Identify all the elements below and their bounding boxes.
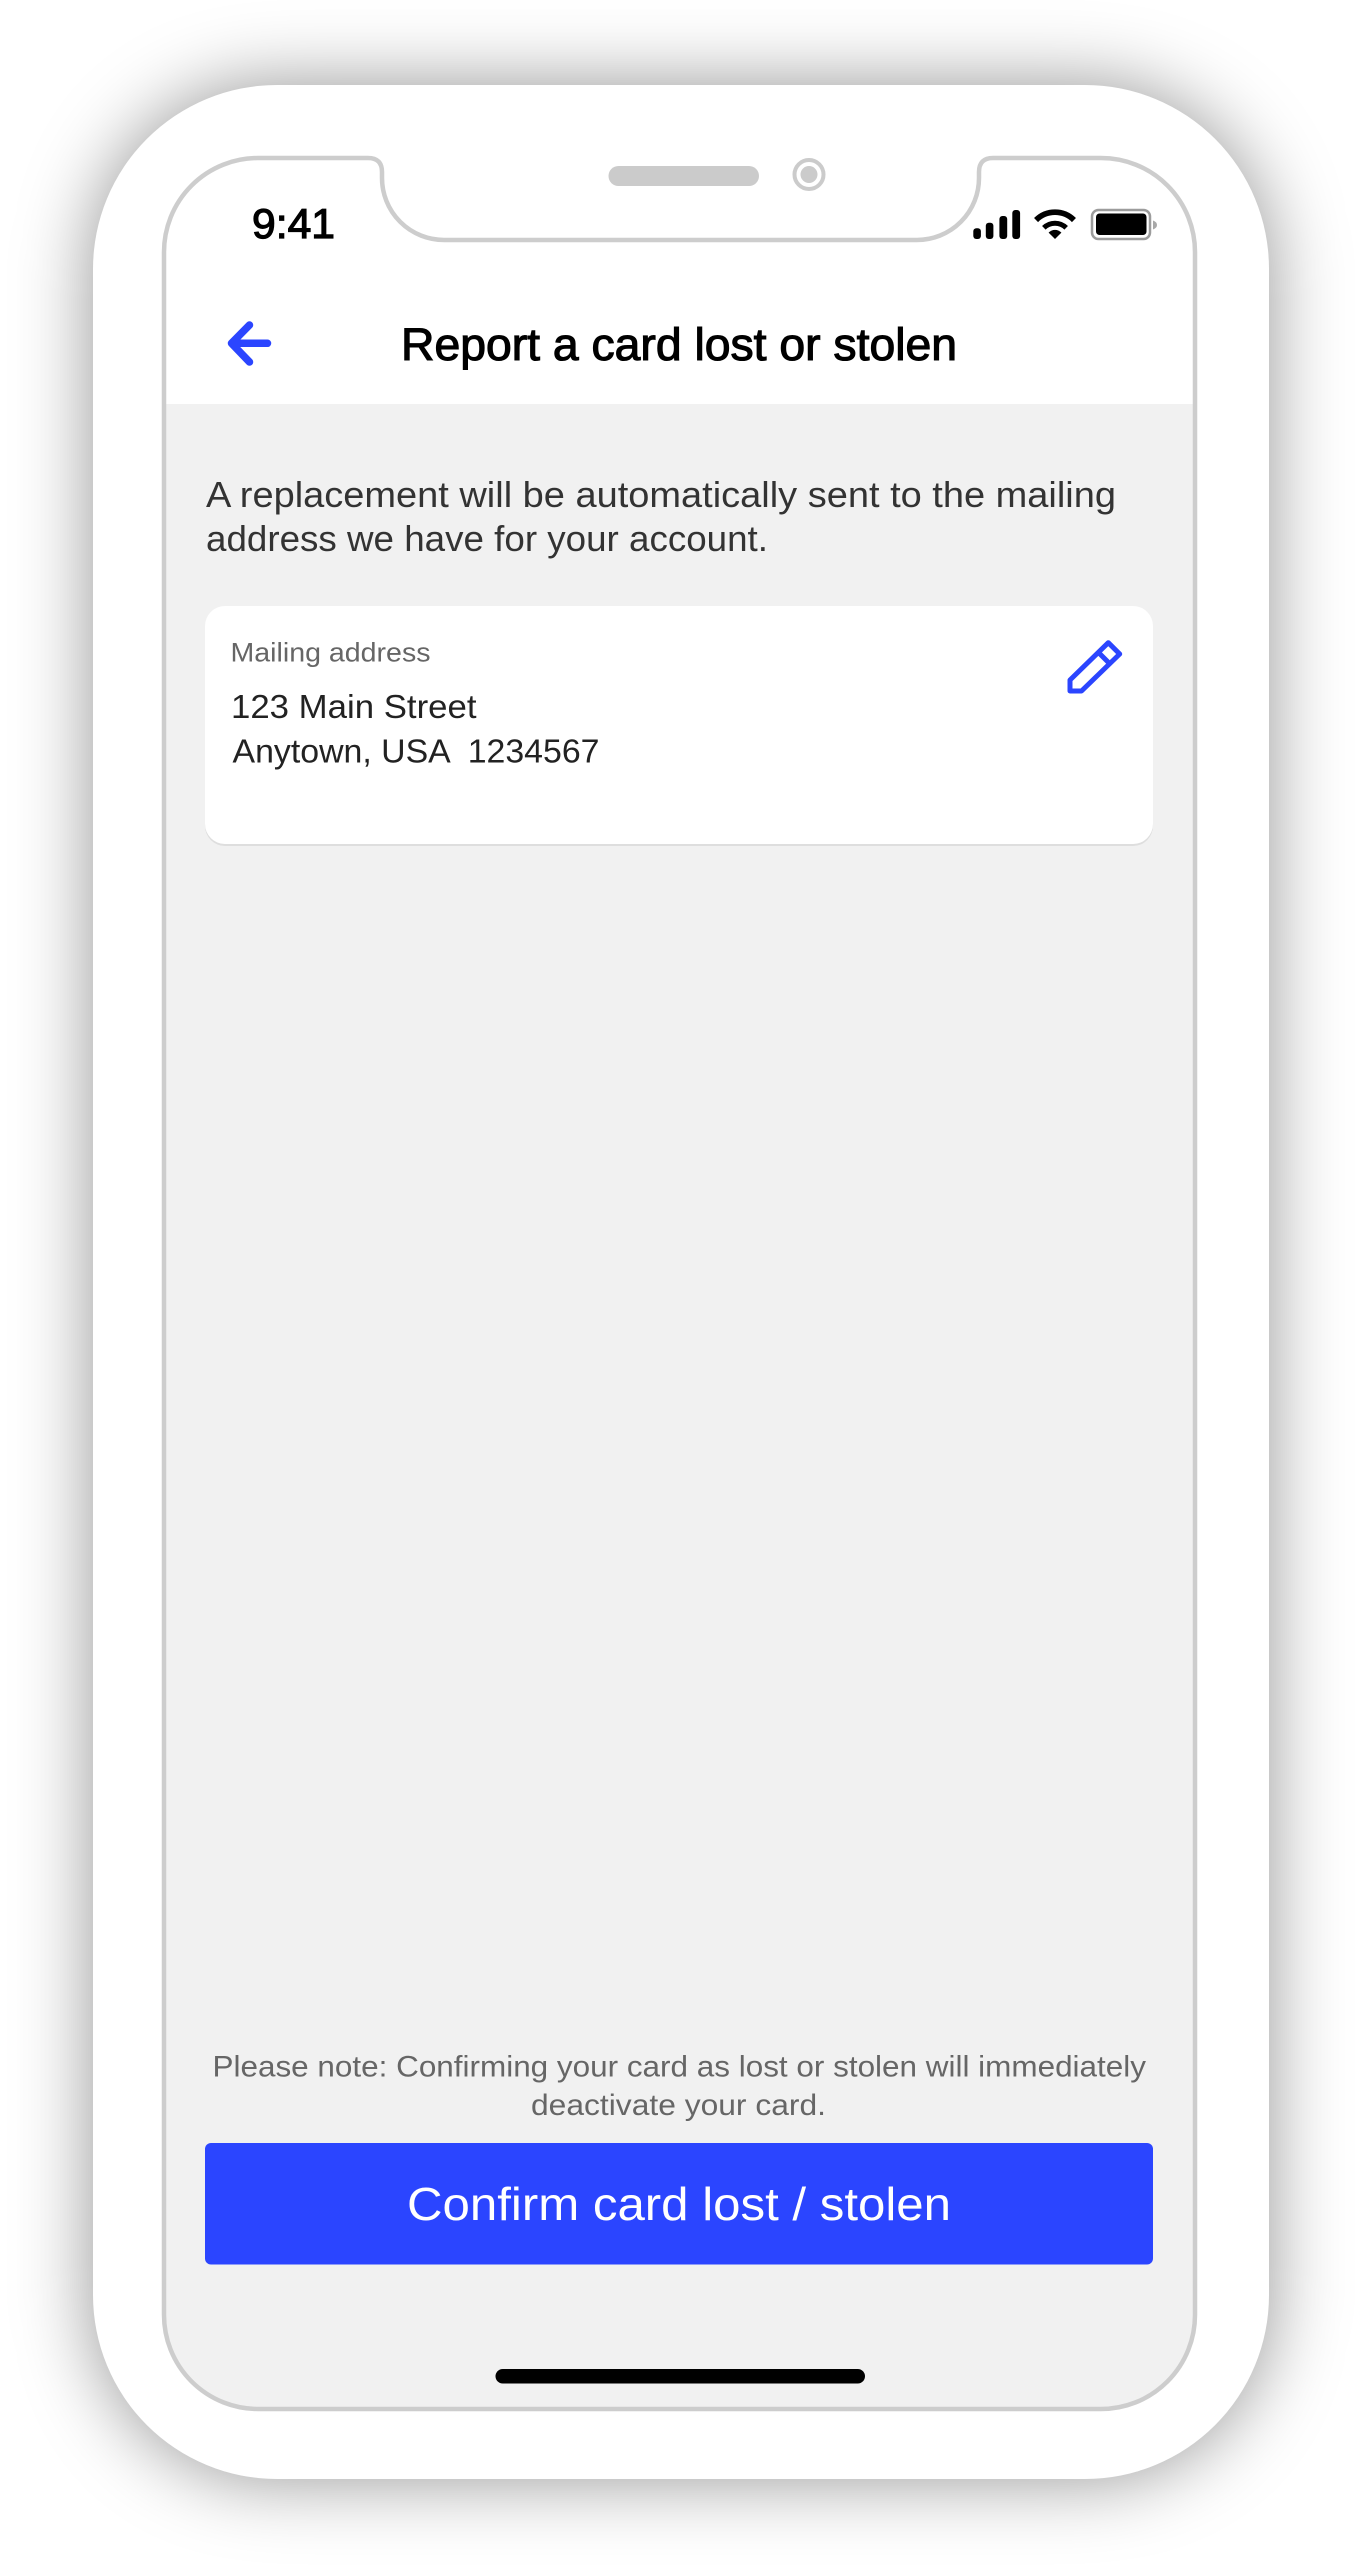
icon: battery	[1092, 210, 1157, 239]
icon: edit pencil	[1070, 643, 1120, 691]
icon: wifi	[1036, 212, 1074, 239]
phone screen	[160, 150, 1200, 2414]
mailing address label: Mailing address	[230, 638, 430, 668]
address text	[231, 689, 600, 770]
instruction text	[206, 474, 1116, 559]
home indicator	[496, 2369, 865, 2384]
camera	[794, 160, 824, 189]
please note text: Please note: Confirming your card as lost or stolen will immediately	[212, 2050, 1146, 2084]
title: Report a card lost or stolen	[401, 319, 957, 370]
please note text: deactivate your card.	[531, 2089, 826, 2122]
address text: Anytown, USA 1234567	[232, 734, 600, 770]
instruction text: address we have for your account.	[206, 518, 768, 559]
address text: 123 Main Street	[231, 689, 477, 726]
speaker	[608, 166, 759, 186]
icon: back arrow	[232, 325, 268, 362]
status bar time: 9:41	[252, 200, 335, 247]
please note text	[212, 2050, 1146, 2122]
instruction text: A replacement will be automatically sent to the mailing	[206, 474, 1116, 515]
confirm button: Confirm card lost / stolen	[407, 2178, 951, 2230]
confirm button	[205, 2143, 1153, 2264]
panel: mailing address card	[205, 606, 1153, 846]
icon: signal bars	[973, 210, 1020, 239]
